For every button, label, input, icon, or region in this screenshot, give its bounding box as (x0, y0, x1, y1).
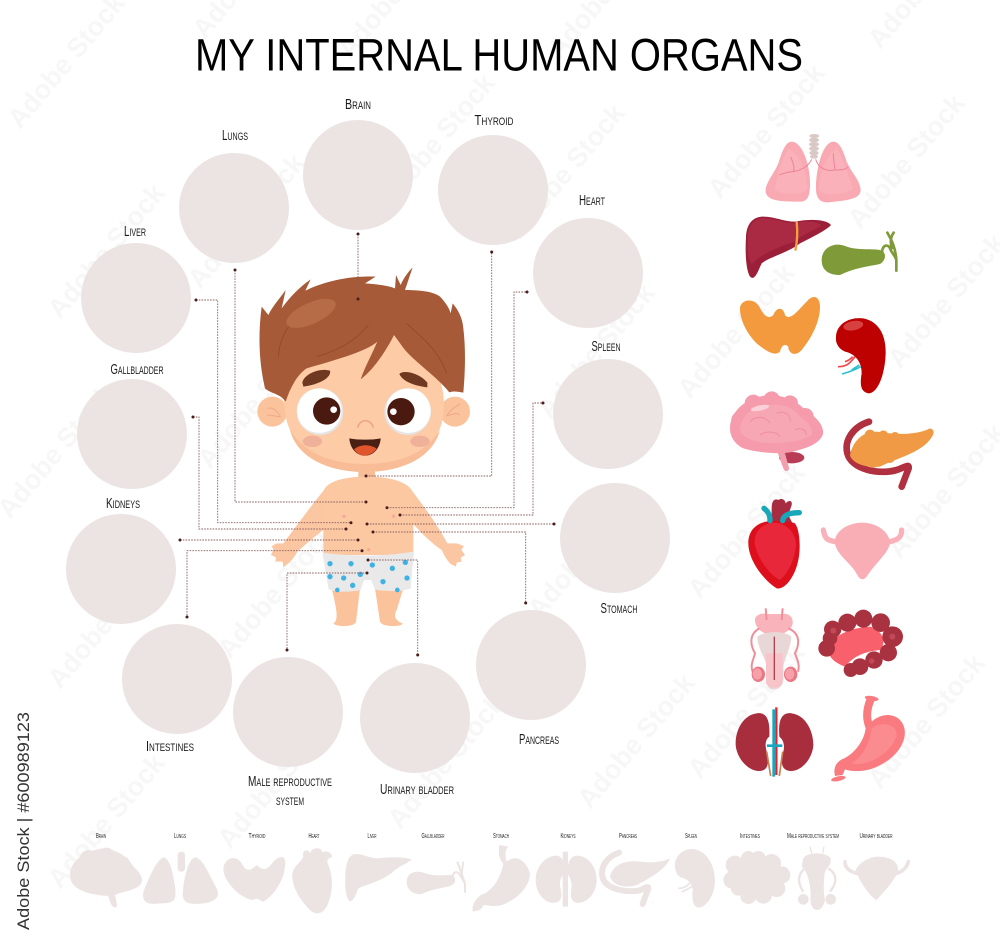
silhouette row, part two (536, 847, 908, 910)
silhouette: stomach (472, 845, 530, 912)
connector: liver (196, 300, 351, 523)
organ: brain (730, 391, 823, 471)
organ: spleen (836, 318, 886, 393)
hair strand lines (278, 307, 447, 373)
organ: thyroid (740, 297, 820, 354)
circle labels: Male reproductive (248, 773, 332, 790)
polka dot shorts (322, 551, 414, 592)
stock watermark pattern: Adobe Stock (182, 147, 311, 294)
stock watermark pattern: Adobe Stock (372, 67, 501, 214)
circle labels: Liver (124, 223, 146, 240)
boy head (257, 323, 470, 472)
stock watermark pattern: Adobe Stock (212, 517, 341, 664)
circle labels: Kidneys (106, 495, 140, 512)
stock watermark pattern: Adobe Stock (702, 57, 831, 204)
boy character (257, 267, 470, 626)
stock watermark pattern: Adobe Stock (682, 457, 811, 604)
stock watermark pattern: Adobe Stock (572, 667, 701, 814)
connector lines (178, 232, 556, 656)
connector: gallbladder (193, 417, 346, 529)
stock watermark pattern: Adobe Stock (522, 477, 651, 624)
silhouette labels: Urinary bladder (860, 833, 893, 840)
hair (259, 267, 465, 402)
silhouette: spleen (675, 849, 715, 908)
connector: kidneys (180, 539, 358, 541)
stock watermark pattern: Adobe Stock (862, 647, 991, 794)
stock watermark pattern: Adobe Stock (532, 277, 661, 424)
circle labels: Intestines (146, 738, 194, 755)
silhouette labels: Male reproductive system (787, 833, 839, 840)
silhouette: liver (345, 854, 412, 902)
circle labels: Thyroid (474, 112, 514, 129)
connector: heart (387, 292, 527, 508)
circle labels: Heart (579, 192, 605, 209)
silhouette labels: Kidneys (560, 833, 576, 840)
connector: pancreas (373, 532, 526, 603)
stock watermark pattern: Adobe Stock (382, 687, 511, 834)
silhouette: gallbladder (407, 862, 465, 894)
silhouette labels: Lungs (174, 833, 186, 840)
connector: male reproductive system (287, 573, 367, 650)
connector: intestines (187, 551, 362, 617)
stock watermark pattern: Adobe Stock (42, 747, 171, 894)
silhouette labels: Liver (368, 833, 377, 840)
organ: male reproductive system (751, 608, 799, 689)
stock watermark pattern: Adobe Stock (842, 87, 971, 234)
circle labels: Stomach (600, 600, 638, 617)
boy body (271, 468, 465, 626)
silhouette labels: Pancreas (619, 833, 637, 840)
connector: thyroid (366, 252, 492, 476)
connector: stomach (367, 523, 554, 525)
circle labels: system (276, 792, 304, 809)
organ: stomach (831, 695, 905, 782)
organ: intestines (818, 610, 903, 677)
organ: liver (746, 217, 831, 278)
face features (297, 370, 431, 456)
circle labels: Pancreas (519, 731, 559, 748)
circle labels (106, 96, 638, 809)
connector dots (178, 232, 556, 656)
silhouette: thyroid (223, 857, 285, 902)
silhouette: heart (292, 848, 332, 913)
organ: heart (748, 499, 800, 588)
silhouette labels: Stomach (493, 833, 509, 840)
silhouette: brain (70, 848, 142, 907)
stock watermark pattern: Adobe Stock (502, 97, 631, 244)
silhouette labels: Gallbladder (422, 833, 445, 840)
colored organs, lower set (736, 499, 905, 782)
circle labels: Gallbladder (110, 361, 164, 378)
silhouette: intestines (723, 851, 790, 904)
silhouette: pancreas (602, 853, 670, 904)
silhouette: urinary bladder (845, 857, 908, 900)
connector: lungs (235, 270, 366, 502)
organ: gallbladder (822, 233, 896, 275)
connector: urinary bladder (368, 560, 418, 655)
connector: spleen (400, 403, 543, 515)
circle labels: Spleen (592, 338, 621, 355)
organ: kidneys (736, 707, 813, 777)
silhouette labels: Brain (96, 833, 106, 840)
circle labels: Lungs (222, 127, 248, 144)
silhouette labels: Heart (308, 833, 320, 840)
colored organs, upper set (730, 134, 934, 487)
stock watermark pattern: Adobe Stock (192, 327, 321, 474)
connector: brain (357, 234, 359, 299)
stock watermark pattern: Adobe Stock (682, 637, 811, 784)
silhouette labels: Thyroid (248, 833, 266, 840)
silhouette labels (96, 833, 893, 840)
stock watermark pattern: Adobe Stock (672, 257, 801, 404)
silhouette: male reproductive system (798, 847, 836, 910)
circle labels: Urinary bladder (380, 781, 454, 798)
stock watermark pattern: Adobe Stock (42, 177, 171, 324)
organ: lungs (766, 134, 861, 202)
silhouette labels: Intestines (740, 833, 760, 840)
hair highlight (282, 293, 340, 334)
silhouette row, part one (70, 845, 530, 913)
stock credit vertical text: Adobe Stock | #600989123 (14, 712, 33, 930)
circle labels: Brain (345, 96, 371, 113)
organ: pancreas (847, 422, 934, 487)
title: MY INTERNAL HUMAN ORGANS (195, 30, 803, 81)
stock watermark pattern: Adobe Stock (42, 547, 171, 694)
silhouette: kidneys (536, 852, 597, 907)
stock watermark pattern: Adobe Stock (212, 707, 341, 854)
silhouette: lungs (143, 852, 218, 904)
organ placeholder circles (66, 120, 670, 773)
silhouette labels: Spleen (685, 833, 697, 840)
organ: urinary bladder (823, 523, 902, 579)
